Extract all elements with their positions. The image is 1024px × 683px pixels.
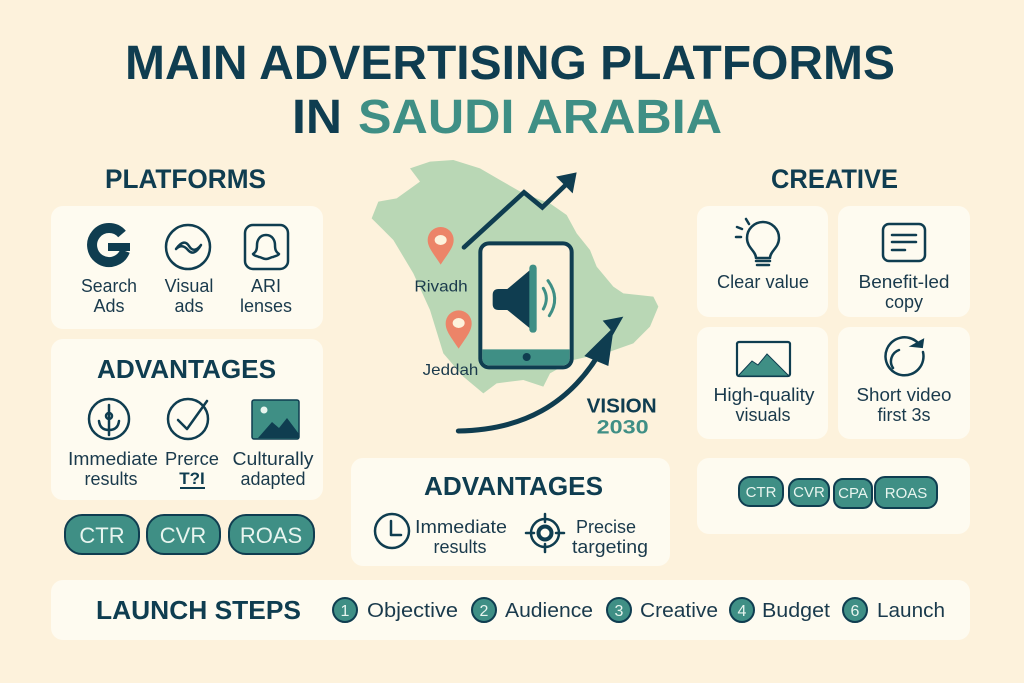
label: immediate results: results [84, 469, 138, 489]
metric pills left: ROAS [240, 523, 302, 548]
label: Clear value [717, 272, 809, 292]
map of Saudi Arabia [372, 160, 658, 393]
heading: ADVANTAGES [424, 471, 603, 501]
label: first 3s [877, 405, 931, 425]
label: immediate results: Immediate [415, 517, 507, 537]
panel: launch steps [51, 580, 970, 640]
panel: advantages left [51, 339, 323, 500]
label [856, 385, 952, 425]
heading: creative: CREATIVE [771, 164, 898, 194]
step 6: Launch [877, 600, 945, 622]
label: Jeddah: Jeddah [423, 362, 478, 379]
metric pills left [65, 515, 314, 554]
icon: clock [375, 514, 409, 548]
step 2 [472, 598, 593, 622]
step 6 [843, 598, 945, 622]
growth arrow [464, 172, 577, 247]
metric pills left: CTR [79, 523, 125, 548]
icon: landscape [737, 342, 790, 376]
step 4: 4 [738, 603, 747, 620]
pin: Jeddah [446, 310, 472, 349]
icon: document [883, 224, 925, 261]
icon: visual ads [166, 225, 210, 269]
label: copy [885, 292, 923, 312]
panel: metrics right: ROAS [885, 485, 927, 502]
label [858, 272, 950, 312]
label: AR lenses: lenses [240, 296, 292, 316]
label: visuals [735, 405, 791, 425]
tablet with speaker [480, 243, 572, 367]
icon: check [168, 399, 208, 439]
card: benefit-led copy [838, 206, 970, 317]
label: immediate results: Immediate [68, 449, 158, 469]
label: search ads: Ads [93, 296, 125, 316]
panel: metrics right [697, 458, 970, 534]
label: Benefit-led [858, 272, 950, 292]
label: immediate results [415, 517, 507, 557]
icon: G logo [92, 228, 130, 262]
label: High-quality [714, 385, 814, 405]
title: IN [292, 91, 342, 144]
step 3: Creative [640, 600, 718, 622]
pin: Riyadh [428, 227, 454, 265]
label: precise targeting [572, 517, 648, 557]
step 6: 6 [851, 603, 860, 620]
label: AR lenses: ARI [251, 276, 281, 296]
step 1: Objective [367, 600, 458, 622]
panel: metrics right: CPA [838, 485, 868, 502]
icon: replay [885, 337, 923, 375]
label: search ads: Search [81, 276, 137, 296]
card: clear value [697, 206, 828, 317]
icon: target [526, 514, 564, 552]
label: precise [165, 449, 219, 489]
label: AR lenses [240, 276, 292, 316]
label: culturally adapted: adapted [240, 469, 306, 489]
icon: AR lenses [245, 225, 288, 269]
vision 2030: VISION [587, 395, 657, 417]
heading: LAUNCH STEPS [96, 595, 301, 625]
step 2: 2 [480, 603, 489, 620]
panel: metrics right: CVR [793, 484, 825, 501]
label: visual ads: Visual [165, 276, 213, 296]
step 4: Budget [762, 600, 830, 622]
label: culturally adapted: Culturally [232, 449, 314, 469]
title: SAUDI ARABIA [358, 91, 722, 144]
panel: platforms [51, 206, 323, 329]
heading: advantages: ADVANTAGES [97, 354, 276, 384]
step 1 [333, 598, 458, 622]
icon: image [252, 400, 299, 439]
label: precise targeting: Precise [576, 517, 636, 537]
label: search ads [81, 276, 137, 316]
step 4 [730, 598, 830, 622]
icon: immediate results [89, 399, 129, 439]
central map illustration [372, 160, 658, 438]
vision 2030: 2030 [597, 417, 649, 438]
label: precise targeting: targeting [572, 537, 648, 557]
label: precise: Prerce [165, 449, 219, 469]
label: visual ads [165, 276, 213, 316]
panel: advantages centre [351, 458, 670, 566]
label [714, 385, 814, 425]
step 1: 1 [341, 603, 350, 620]
label: culturally adapted [232, 449, 314, 489]
label: Short video [856, 385, 952, 405]
label: immediate results [68, 449, 158, 489]
panel: metrics right: CTR [746, 484, 777, 501]
heading: platforms: PLATFORMS [105, 164, 266, 194]
label: Riyadh: Rivadh [414, 278, 468, 295]
card: short video [838, 327, 970, 439]
icon: light bulb [736, 219, 779, 265]
step 3: 3 [615, 603, 624, 620]
vision 2030 [587, 395, 657, 438]
step 2: Audience [505, 600, 593, 622]
card: high-quality visuals [697, 327, 828, 439]
label: precise: T?I [179, 469, 205, 488]
sweep arrow [458, 317, 623, 431]
metric pills left: CVR [160, 523, 206, 548]
label: immediate results: results [433, 537, 487, 557]
step 3 [607, 598, 718, 622]
title: MAIN ADVERTISING PLATFORMS [125, 37, 895, 90]
label: visual ads: ads [174, 296, 204, 316]
title [125, 37, 895, 144]
